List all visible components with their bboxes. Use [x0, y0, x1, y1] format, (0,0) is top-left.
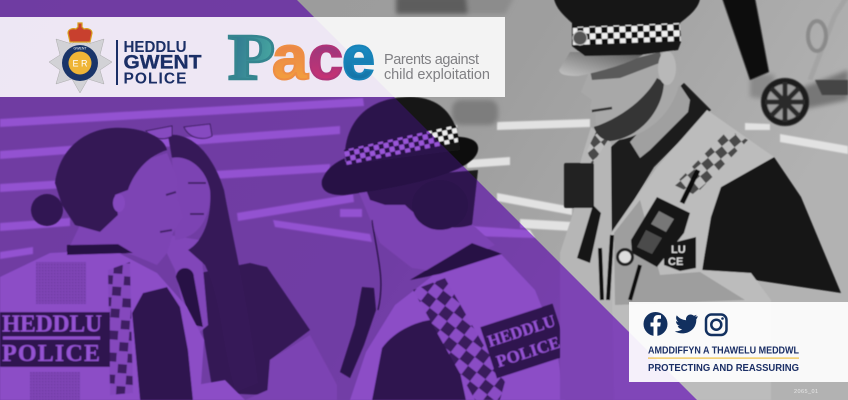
- road markings: [0, 98, 848, 259]
- Pace logo: c: [308, 24, 343, 93]
- neck and face: [70, 153, 183, 265]
- badge: POLICE: [494, 333, 563, 371]
- second woman: [146, 124, 337, 400]
- wordmark: GWENT: [124, 52, 202, 74]
- hair: [55, 128, 167, 232]
- divider: [116, 40, 118, 85]
- reference code: 2065_01: [794, 389, 818, 395]
- cap band: [573, 23, 681, 45]
- Pace logo: e: [342, 24, 375, 93]
- earpiece cable: [372, 220, 381, 310]
- wordmark: POLICE: [124, 70, 186, 88]
- vest straps: [600, 235, 640, 300]
- ring: [62, 45, 98, 81]
- visor: [559, 52, 647, 76]
- hand: [195, 380, 245, 400]
- divider line: [648, 358, 799, 359]
- ear: [658, 51, 676, 85]
- vest checkers: [674, 130, 748, 195]
- icon: facebook: [644, 312, 668, 336]
- checker strip: [108, 262, 133, 395]
- vest left: [560, 127, 617, 400]
- background wheel and frame: [764, 0, 848, 123]
- Pace strapline: Parents against: [384, 52, 479, 68]
- checker band: [344, 125, 458, 165]
- arm: [245, 335, 337, 400]
- badge: POLICE: [2, 341, 100, 367]
- background leg: [722, 0, 769, 80]
- clip: [618, 250, 632, 264]
- ear: [113, 194, 125, 212]
- hair bun: [31, 194, 63, 226]
- cap badge: [573, 31, 587, 45]
- Pace strapline: child exploitation: [384, 67, 490, 83]
- Pace logo: P: [228, 21, 275, 94]
- crown: [68, 23, 92, 42]
- sleeve: [372, 319, 466, 400]
- chest badge: [664, 237, 696, 271]
- Gwent Police crest: GWENT: [73, 46, 87, 50]
- wordmark: HEDDLU: [124, 39, 186, 56]
- Gwent Police crest: E R: [72, 58, 88, 68]
- vest: [0, 250, 204, 400]
- chest: [157, 233, 208, 340]
- sunglasses: [146, 124, 212, 139]
- Pace strapline: [384, 52, 490, 83]
- hair: [168, 135, 258, 392]
- icon: instagram: [706, 314, 726, 335]
- top: [200, 263, 310, 395]
- chest badge: CE: [668, 256, 683, 268]
- checker strip: [413, 278, 505, 400]
- sleeve: [132, 287, 193, 400]
- face: [172, 158, 210, 240]
- badge: [480, 304, 569, 378]
- radio: [631, 170, 698, 267]
- wordmark: [124, 39, 202, 88]
- star: [49, 36, 112, 93]
- badge: HEDDLU: [485, 311, 558, 351]
- beard: [594, 78, 664, 141]
- cap crown: [554, 0, 700, 56]
- slogan english: PROTECTING AND REASSURING: [648, 362, 799, 374]
- neck: [630, 85, 690, 158]
- icon: twitter: [675, 314, 698, 333]
- brim: [322, 137, 478, 195]
- vest: [350, 253, 565, 400]
- vest right: [611, 110, 774, 400]
- mesh panels: [30, 262, 86, 400]
- badge: HEDDLU: [2, 312, 102, 338]
- microphone: [176, 268, 203, 327]
- collar: [67, 244, 133, 255]
- neck: [358, 190, 495, 272]
- eye and smile: [160, 192, 176, 232]
- face: [581, 45, 680, 141]
- centre: [68, 52, 92, 74]
- sleeve: [702, 157, 841, 293]
- badge: [0, 312, 110, 367]
- vest shading: [614, 200, 745, 305]
- bottom slogan panel: [629, 302, 848, 382]
- collar: [410, 243, 502, 280]
- right officer: [554, 0, 841, 400]
- body camera: [564, 163, 594, 208]
- eyes and mouth: [188, 183, 206, 214]
- crown: [345, 97, 460, 165]
- Gwent Police crest: [49, 23, 112, 93]
- mouth: [592, 108, 612, 111]
- eye shadow: [590, 52, 662, 80]
- top logo panel: [0, 17, 505, 97]
- tool pouch: [577, 205, 601, 263]
- hair: [362, 170, 478, 228]
- background figures: [396, 0, 848, 125]
- slogan welsh: AMDDIFFYN A THAWELU MEDDWL: [648, 344, 800, 356]
- bun: [412, 180, 468, 230]
- Pace logo: a: [272, 24, 309, 93]
- chest badge: LU: [671, 244, 686, 256]
- radio: [340, 287, 376, 378]
- centre officer: [322, 97, 569, 400]
- shirt: [611, 83, 711, 232]
- Pace logo: [228, 21, 375, 94]
- left officer: [0, 128, 245, 400]
